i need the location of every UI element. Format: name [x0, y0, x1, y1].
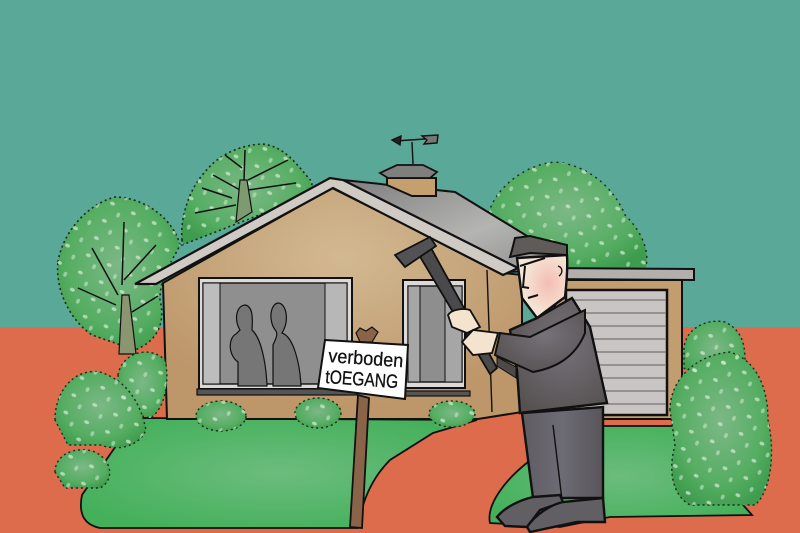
man: hands — [448, 309, 498, 355]
sign: verboden toegang — [318, 340, 408, 399]
background: sky — [0, 0, 800, 328]
lawn: left — [81, 418, 477, 528]
window: large, with two people — [197, 278, 357, 395]
sign post — [350, 327, 378, 528]
lawn: right — [489, 426, 752, 527]
man: legs and shoes — [497, 407, 605, 532]
tree: back right — [487, 162, 647, 270]
man: head with cap — [510, 236, 567, 318]
house: front wall — [163, 188, 522, 419]
tree: left — [58, 197, 180, 354]
roof: gable trim — [135, 178, 518, 284]
sledgehammer — [395, 237, 497, 374]
shrubs: left cluster — [55, 352, 167, 488]
background: ground — [0, 327, 800, 533]
sign: verboden toegang: verboden — [328, 346, 404, 372]
person with telephone — [230, 305, 267, 386]
sign: verboden toegang: tOEGANG — [325, 367, 399, 393]
person standing — [271, 303, 301, 386]
weather vane — [392, 135, 438, 164]
window sill — [197, 389, 357, 395]
wall: corner line — [487, 270, 492, 412]
chimney with cupola — [380, 165, 437, 196]
tree: back centre — [182, 144, 312, 245]
roof: grey side — [343, 180, 550, 272]
garage — [540, 268, 694, 419]
shrubs: right cluster — [670, 321, 772, 505]
shrubs under windows — [196, 398, 475, 431]
man: torso and arm — [495, 298, 607, 413]
window: small — [396, 280, 470, 396]
